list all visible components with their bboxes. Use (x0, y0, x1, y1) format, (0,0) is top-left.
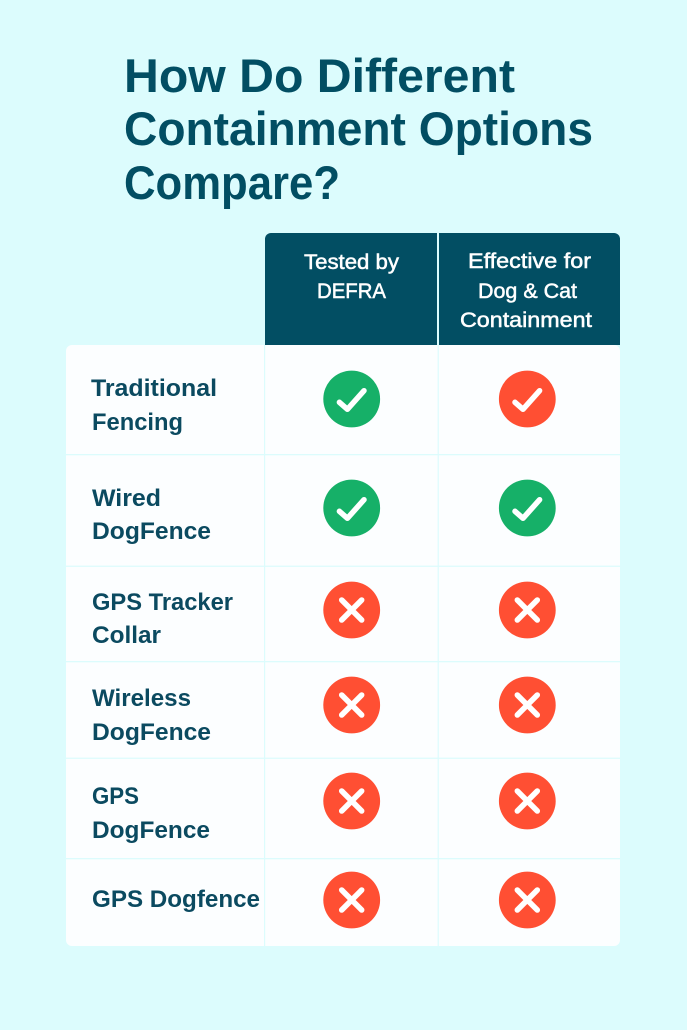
icon: red cross, GPS Dogfence, DEFRA (323, 872, 380, 928)
header: Tested by DEFRA (265, 233, 437, 345)
row label: Wired DogFence: DogFence (92, 518, 211, 545)
title (124, 49, 593, 209)
icon: green check, Wired DogFence, DEFRA (323, 480, 380, 536)
row label: GPS Dogfence: GPS Dogfence (92, 886, 260, 913)
row label: Wireless DogFence (92, 685, 211, 746)
title: Containment Options (124, 102, 593, 155)
header: Effective for Dog & Cat Containment (439, 233, 620, 345)
row label: GPS Tracker Collar (92, 589, 233, 649)
icon: red check, Traditional Fencing, Effective (499, 371, 556, 427)
row label: Wired DogFence: Wired (92, 485, 161, 512)
header: Tested by DEFRA: Tested by (304, 251, 400, 274)
icon: red cross, Wireless DogFence, Effective (499, 677, 556, 733)
row label: GPS DogFence: DogFence (92, 817, 210, 844)
row label: Wireless DogFence: Wireless (92, 685, 191, 712)
title: Compare? (124, 156, 340, 209)
row label: GPS Tracker Collar: Collar (92, 622, 161, 649)
icon: red cross, GPS Dogfence, Effective (499, 872, 556, 928)
icon: green check, Wired DogFence, Effective (499, 480, 556, 536)
icon: red cross, GPS DogFence, Effective (499, 773, 556, 829)
header: Effective for Dog & Cat Containment: Dog & Cat (478, 280, 577, 303)
icon: red cross, Wireless DogFence, DEFRA (323, 677, 380, 733)
row label: Traditional Fencing: Fencing (92, 409, 183, 436)
row label: GPS DogFence: GPS (92, 783, 139, 810)
row label: GPS DogFence (92, 783, 210, 844)
icon: red cross, GPS Tracker Collar, DEFRA (323, 582, 380, 638)
row label: Traditional Fencing (91, 375, 217, 436)
row label: Traditional Fencing: Traditional (91, 375, 217, 402)
title: How Do Different (124, 49, 515, 102)
header: Effective for Dog & Cat Containment: Containment (460, 309, 592, 332)
row label: Wireless DogFence: DogFence (92, 719, 211, 746)
row label: Wired DogFence (92, 485, 211, 545)
row label: GPS Tracker Collar: GPS Tracker (92, 589, 233, 616)
panel: table body (66, 345, 620, 946)
header: Effective for Dog & Cat Containment: Effective for (468, 250, 591, 273)
icon: green check, Traditional Fencing, DEFRA (323, 371, 380, 427)
icon: red cross, GPS Tracker Collar, Effective (499, 582, 556, 638)
icon: red cross, GPS DogFence, DEFRA (323, 773, 380, 829)
header: Tested by DEFRA: DEFRA (317, 280, 386, 303)
